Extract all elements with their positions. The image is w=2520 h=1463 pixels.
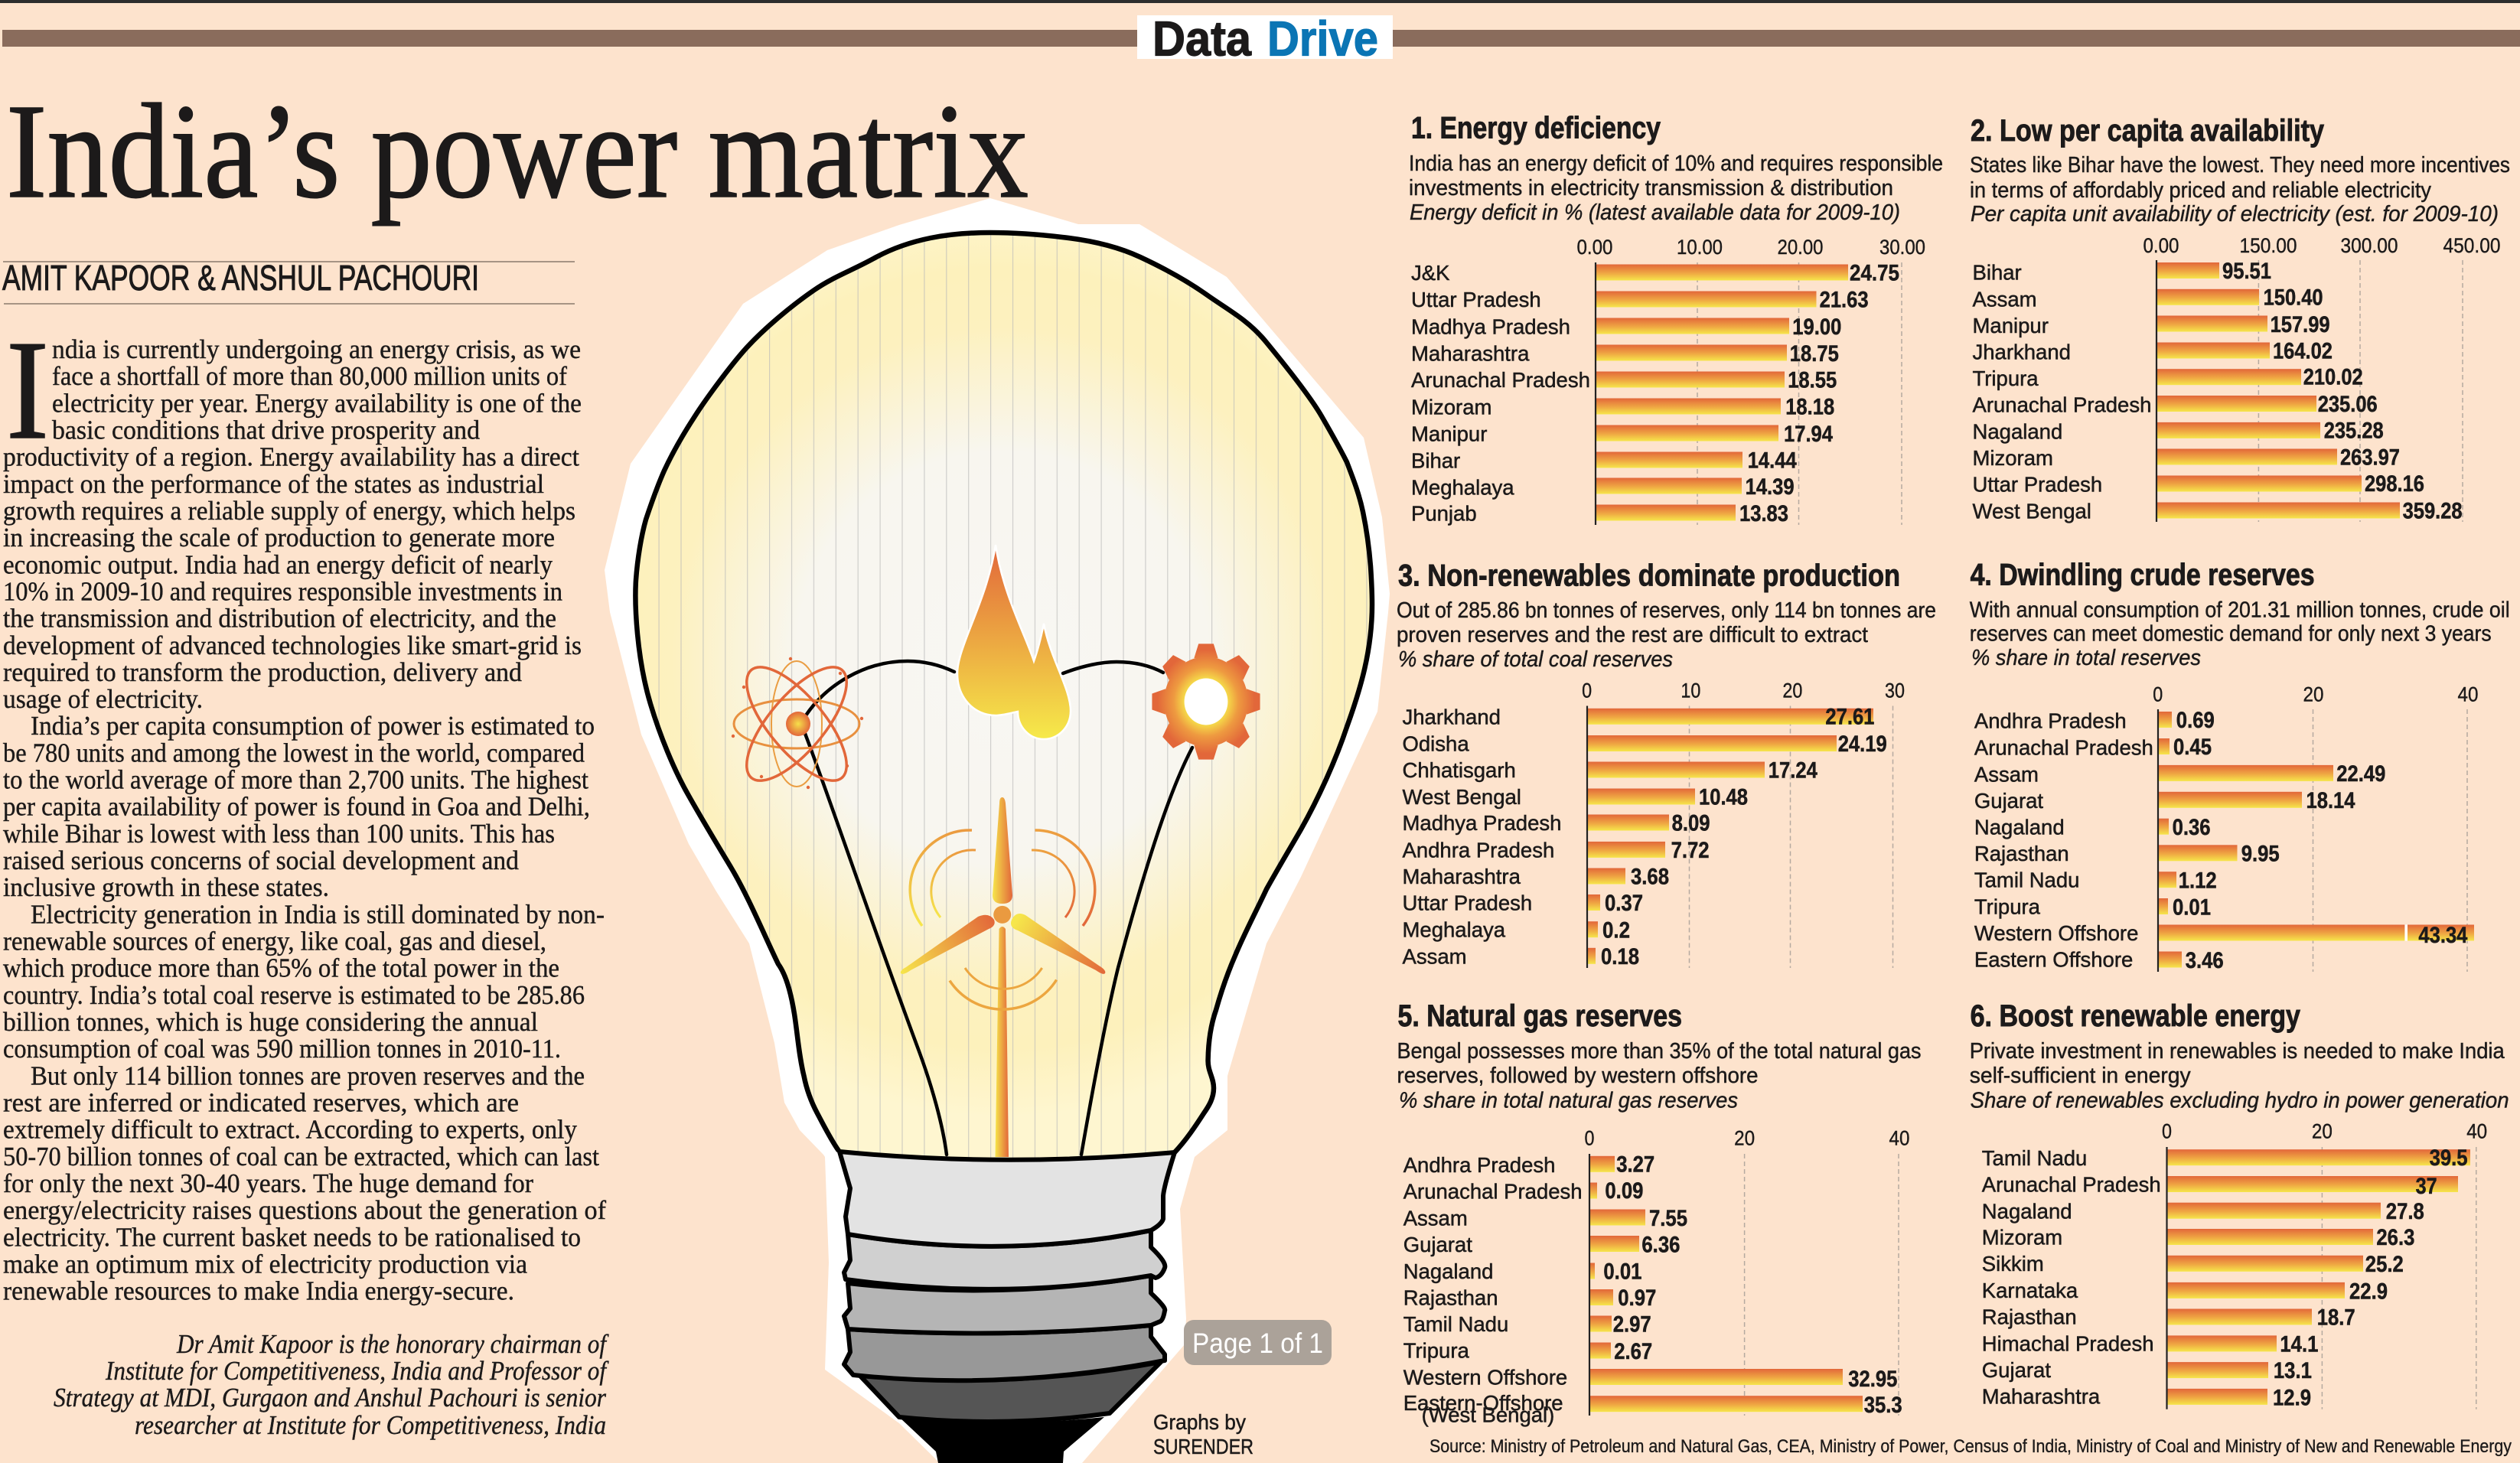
- bar chart 1: 30.00: [1879, 236, 1925, 259]
- bar chart 3: 0.37: [1605, 891, 1643, 916]
- bar chart 4: [1974, 683, 2478, 973]
- heading 5: 5. Natural gas reserves: [1397, 999, 1682, 1033]
- bar chart 3: [1402, 679, 1905, 969]
- bar chart 5: 2.97: [1613, 1311, 1651, 1337]
- bar chart 1: 19.00: [1792, 314, 1841, 340]
- bar chart 6: Arunachal Pradesh: [1982, 1173, 2161, 1197]
- article body text: usage of electricity.: [3, 684, 203, 714]
- description 5: Bengal possesses more than 35% of the total natural gas: [1397, 1039, 1921, 1064]
- bar chart 5: 7.55: [1649, 1206, 1687, 1231]
- bar chart 6: 40: [2466, 1119, 2487, 1142]
- bar chart 2: 164.02: [2273, 338, 2333, 363]
- description 1: Energy deficit in % (latest available data for 2009-10): [1410, 200, 1900, 225]
- white halo around bulb: [605, 198, 1390, 1463]
- article body text: per capita availability of power is found in Goa and Delhi,: [3, 792, 590, 822]
- bar chart 1: 18.55: [1788, 367, 1837, 393]
- bar chart 1: Manipur: [1411, 422, 1487, 446]
- author note: Institute for Competitiveness, India and Professor of: [105, 1356, 609, 1386]
- bar chart 3: 0.18: [1601, 944, 1639, 969]
- bar chart 6: 13.1: [2274, 1358, 2312, 1383]
- bar chart 6: 18.7: [2317, 1305, 2355, 1330]
- icon: wind turbine: [901, 797, 1105, 1157]
- bar chart 4: 3.46: [2186, 948, 2224, 973]
- bar chart 1: Uttar Pradesh: [1411, 288, 1541, 311]
- bar chart 3: 20: [1782, 679, 1802, 702]
- bar chart 1: 13.83: [1739, 501, 1788, 526]
- bar chart 6: Maharashtra: [1982, 1385, 2101, 1409]
- bar chart 5: Gujarat: [1403, 1233, 1472, 1256]
- bar chart 5: 6.36: [1641, 1232, 1680, 1257]
- bar chart 6: 14.1: [2280, 1331, 2318, 1357]
- bar chart 5: Arunachal Pradesh: [1403, 1180, 1583, 1204]
- bar chart 2: Uttar Pradesh: [1973, 473, 2102, 497]
- bulb glass glow: [628, 226, 1381, 1171]
- graphics credit: SURENDER: [1153, 1435, 1253, 1458]
- bar chart 6: 39.5: [2430, 1145, 2468, 1171]
- bar chart 2: 150.40: [2264, 285, 2323, 311]
- bar chart 3: Uttar Pradesh: [1402, 891, 1532, 915]
- bar chart 1: 14.44: [1748, 448, 1797, 473]
- bar chart 2: 157.99: [2271, 312, 2330, 337]
- description 3: proven reserves and the rest are difficult to extract: [1397, 623, 1868, 647]
- bar chart 1: Bihar: [1411, 449, 1460, 473]
- article body text: electricity per year. Energy availability is one of the: [52, 388, 582, 418]
- bar chart 2: 298.16: [2365, 471, 2424, 497]
- bar chart 4: 40: [2458, 683, 2478, 705]
- bar chart 3: 7.72: [1671, 838, 1710, 863]
- article body text: be 780 units and among the lowest in the world, compared: [3, 738, 585, 767]
- article body text: face a shortfall of more than 80,000 million units of: [52, 361, 567, 391]
- bar chart 5: 2.67: [1614, 1339, 1652, 1364]
- bar chart 1: Arunachal Pradesh: [1411, 368, 1590, 392]
- bar chart 5: Andhra Pradesh: [1403, 1153, 1555, 1177]
- bar chart 1: 14.39: [1746, 474, 1795, 500]
- bar chart 1: Mizoram: [1411, 396, 1491, 419]
- panel 5: natural gas reserves: [1397, 999, 1921, 1427]
- bar chart 4: 0.36: [2173, 815, 2211, 840]
- article body text: 10% in 2009-10 and requires responsible investments in: [3, 576, 562, 606]
- description 2: in terms of affordably priced and reliable electricity: [1970, 178, 2431, 203]
- bar chart 3: 0.2: [1602, 917, 1630, 943]
- bar chart 6: Tamil Nadu: [1982, 1146, 2087, 1170]
- panel 6: boost renewable energy: [1970, 999, 2509, 1410]
- description 6: self-sufficient in energy: [1970, 1064, 2191, 1088]
- bar chart 3: 0: [1582, 679, 1592, 702]
- article body text: India’s per capita consumption of power is estimated to: [31, 711, 595, 741]
- article body text: renewable resources to make India energy-secure.: [3, 1276, 514, 1306]
- description 5: reserves, followed by western offshore: [1397, 1064, 1759, 1088]
- bar chart 4: Assam: [1974, 763, 2039, 787]
- glass stripes: [628, 226, 1381, 1171]
- article body text: to the world average of more than 2,700 units. The highest: [3, 765, 588, 795]
- article body text: consumption of coal was 590 million tonnes in 2010-11.: [3, 1034, 561, 1064]
- bar chart 2: West Bengal: [1973, 500, 2091, 523]
- bar chart 4: 43.34: [2418, 923, 2468, 948]
- bar chart 6: Rajasthan: [1982, 1305, 2077, 1329]
- bar chart 2: 300.00: [2340, 234, 2398, 257]
- article body text: which produce more than 65% of the total power in the: [3, 953, 559, 983]
- bar chart 4: Gujarat: [1974, 789, 2043, 813]
- bar chart 3: West Bengal: [1402, 785, 1521, 809]
- bar chart 4: Andhra Pradesh: [1974, 709, 2127, 733]
- bar chart 1: J&K: [1411, 261, 1450, 285]
- bar chart 6: Himachal Pradesh: [1982, 1332, 2153, 1356]
- bar chart 4: Western Offshore: [1974, 921, 2138, 945]
- bar chart 4: 0.01: [2173, 894, 2211, 920]
- bar chart 6: Gujarat: [1982, 1358, 2051, 1382]
- description 6: [1970, 1039, 2509, 1113]
- bar chart 4: 18.14: [2306, 788, 2355, 813]
- bar chart 2: Arunachal Pradesh: [1973, 393, 2151, 417]
- bar chart 6: 20: [2312, 1119, 2333, 1142]
- panel 4: dwindling crude reserves: [1970, 558, 2510, 973]
- panel 3: non-renewables dominate production: [1397, 559, 1936, 969]
- bar chart 1: 0.00: [1576, 236, 1613, 259]
- bar chart 6: 25.2: [2365, 1252, 2404, 1277]
- article body text: while Bihar is lowest with less than 100 units. This has: [3, 819, 555, 849]
- article body text: basic conditions that drive prosperity and: [52, 415, 480, 445]
- bar chart 5: 3.27: [1616, 1152, 1654, 1177]
- bar chart 5: [1403, 1126, 1910, 1427]
- bar chart 5: 0.97: [1618, 1285, 1656, 1311]
- filament wires: [804, 661, 1192, 1155]
- bar chart 1: Madhya Pradesh: [1411, 315, 1570, 339]
- bar chart 6: Mizoram: [1982, 1226, 2062, 1250]
- bar chart 5: (West Bengal): [1422, 1403, 1554, 1427]
- bar chart 6: Karnataka: [1982, 1279, 2078, 1302]
- bar chart 3: 10.48: [1699, 784, 1748, 810]
- bar chart 2: Nagaland: [1973, 420, 2062, 444]
- bar chart 5: 40: [1889, 1126, 1910, 1149]
- bar chart 3: Chhatisgarh: [1402, 758, 1516, 782]
- bar chart 4: Rajasthan: [1974, 842, 2069, 865]
- heading 6: 6. Boost renewable energy: [1971, 999, 2301, 1033]
- bar chart 5: 32.95: [1848, 1367, 1897, 1392]
- bar chart 3: Maharashtra: [1402, 865, 1521, 888]
- bar chart 2: 0.00: [2143, 234, 2179, 257]
- bar chart 2: 95.51: [2222, 259, 2271, 284]
- bar chart 3: 10: [1681, 679, 1700, 702]
- article body text: the transmission and distribution of electricity, and the: [3, 604, 556, 634]
- bar chart 2: Jharkhand: [1973, 340, 2071, 364]
- bar chart 2: Assam: [1973, 287, 2037, 311]
- bar chart 2: 450.00: [2443, 234, 2501, 257]
- byline: AMIT KAPOOR & ANSHUL PACHOURI: [2, 258, 479, 298]
- article body text: required to transform the production, delivery and: [3, 657, 522, 687]
- article body text: inclusive growth in these states.: [3, 872, 329, 902]
- bar chart 1: Maharashtra: [1411, 342, 1530, 366]
- bar chart 4: 20: [2303, 683, 2323, 705]
- bar chart 1: 18.75: [1790, 341, 1839, 367]
- bar chart 1: 17.94: [1784, 422, 1833, 447]
- author note: Strategy at MDI, Gurgaon and Anshul Pachouri is senior: [54, 1383, 606, 1412]
- article body text: productivity of a region. Energy availability has a direct: [3, 442, 579, 472]
- article body text: extremely difficult to extract. According to experts, only: [3, 1115, 577, 1145]
- description 1: investments in electricity transmission & distribution: [1409, 176, 1893, 200]
- bar chart 6: 22.9: [2349, 1279, 2388, 1304]
- header label: Drive: Drive: [1267, 11, 1378, 66]
- header label: Data: Data: [1152, 11, 1251, 66]
- bar chart 1: 10.00: [1677, 236, 1723, 259]
- author note: Dr Amit Kapoor is the honorary chairman of: [176, 1329, 609, 1359]
- heading 2: 2. Low per capita availability: [1971, 114, 2325, 148]
- article body text: country. India’s total coal reserve is estimated to be 285.86: [3, 980, 585, 1010]
- bar chart 5: 20: [1734, 1126, 1755, 1149]
- bar chart 3: Madhya Pradesh: [1402, 811, 1561, 835]
- bar chart 1: [1411, 236, 1925, 526]
- bar chart 6: 37: [2416, 1174, 2437, 1199]
- description 5: % share in total natural gas reserves: [1399, 1088, 1738, 1113]
- bar chart 4: 0.45: [2173, 735, 2212, 760]
- bar chart 1: Meghalaya: [1411, 476, 1514, 500]
- bulb screw base: [839, 1152, 1175, 1463]
- heading 1: 1. Energy deficiency: [1411, 112, 1661, 145]
- illustration: light bulb: [605, 198, 1390, 1463]
- bar chart 1: 18.18: [1785, 394, 1834, 419]
- bar chart 4: Nagaland: [1974, 816, 2065, 839]
- bar chart 5: Eastern-Offshore: [1403, 1391, 1563, 1415]
- bar chart 5: Tamil Nadu: [1403, 1312, 1508, 1336]
- bar chart 1: 21.63: [1820, 287, 1869, 312]
- bar chart 2: Manipur: [1973, 314, 2049, 337]
- bar chart 3: 27.61: [1825, 705, 1874, 730]
- panel 1: energy deficiency: [1409, 112, 1943, 526]
- article body text: But only 114 billion tonnes are proven reserves and the: [31, 1061, 585, 1090]
- bar chart 3: 24.19: [1838, 732, 1887, 757]
- drop cap: I: [6, 311, 49, 469]
- bar chart 4: Tripura: [1974, 895, 2041, 919]
- bar chart 2: 210.02: [2303, 364, 2363, 389]
- article body text: impact on the performance of the states as industrial: [3, 469, 544, 499]
- page indicator pill: Page 1 of 1: [1192, 1328, 1323, 1359]
- bar chart 5: 35.3: [1864, 1393, 1902, 1418]
- article body text: economic output. India had an energy deficit of nearly: [3, 549, 553, 579]
- author note: [54, 1329, 609, 1440]
- bar chart 6: 27.8: [2386, 1199, 2424, 1224]
- bar chart 2: 150.00: [2239, 234, 2297, 257]
- bar chart 5: 0: [1584, 1126, 1595, 1149]
- bar chart 3: Odisha: [1402, 732, 1469, 756]
- bar chart 3: 17.24: [1769, 758, 1817, 783]
- heading 3: 3. Non-renewables dominate production: [1398, 559, 1900, 592]
- bar chart 3: Jharkhand: [1402, 705, 1501, 729]
- article body text: [3, 311, 606, 1306]
- article body text: raised serious concerns of social development and: [3, 846, 519, 875]
- bar chart 5: Nagaland: [1403, 1259, 1493, 1283]
- page indicator pill: [1184, 1320, 1332, 1365]
- bar chart 6: Sikkim: [1982, 1252, 2044, 1276]
- article body text: development of advanced technologies like smart-grid is: [3, 630, 582, 660]
- bar chart 4: 9.95: [2241, 841, 2280, 866]
- bar chart 3: 3.68: [1631, 864, 1669, 889]
- bar chart 6: 0: [2162, 1119, 2172, 1142]
- title: India’s power matrix: [6, 77, 1029, 226]
- bar chart 2: Mizoram: [1973, 446, 2053, 470]
- article body text: billion tonnes, which is huge considering the annual: [3, 1007, 538, 1037]
- bar chart 2: 235.06: [2318, 392, 2378, 417]
- bar chart 2: 235.28: [2324, 418, 2384, 443]
- graphics credit: [1153, 1410, 1253, 1458]
- article body text: growth requires a reliable supply of energy, which helps: [3, 496, 575, 526]
- bar chart 5: Western Offshore: [1403, 1366, 1567, 1390]
- bulb outline: [635, 233, 1372, 1152]
- header band: [0, 0, 2520, 66]
- icon: oil drops: [957, 545, 1071, 739]
- bar chart 2: 263.97: [2340, 445, 2400, 470]
- article body text: in increasing the scale of production to generate more: [3, 523, 555, 552]
- bar chart 5: Tripura: [1403, 1339, 1469, 1363]
- description 4: [1970, 598, 2510, 670]
- bar chart 1: Punjab: [1411, 502, 1477, 526]
- icon: gear: [1152, 644, 1260, 760]
- description 1: [1409, 152, 1943, 225]
- bar chart 3: Meghalaya: [1402, 918, 1506, 942]
- bar chart 2: [1973, 234, 2501, 523]
- bar chart 3: Assam: [1402, 945, 1467, 969]
- description 2: Per capita unit availability of electricity (est. for 2009-10): [1971, 202, 2499, 226]
- article body text: Electricity generation in India is still dominated by non-: [31, 899, 605, 929]
- author note: researcher at Institute for Competitiveness, India: [135, 1410, 606, 1440]
- description 3: % share of total coal reserves: [1398, 647, 1673, 672]
- bar chart 4: 0.69: [2176, 708, 2215, 733]
- description 1: India has an energy deficit of 10% and requires responsible: [1409, 152, 1943, 176]
- bar chart 4: Tamil Nadu: [1974, 868, 2079, 892]
- bar chart 4: Eastern Offshore: [1974, 948, 2133, 972]
- graphics credit: Graphs by: [1153, 1410, 1246, 1434]
- article body text: ndia is currently undergoing an energy crisis, as we: [52, 334, 581, 364]
- description 3: [1397, 598, 1936, 672]
- heading 4: 4. Dwindling crude reserves: [1971, 558, 2315, 591]
- bar chart 1: 20.00: [1777, 236, 1823, 259]
- icon: atom: [730, 652, 863, 796]
- bar chart 4: 22.49: [2336, 761, 2385, 787]
- bar chart 5: Assam: [1403, 1207, 1468, 1230]
- bar chart 6: 26.3: [2376, 1225, 2414, 1250]
- bar chart 3: Andhra Pradesh: [1402, 839, 1554, 862]
- bar chart 4: 1.12: [2179, 868, 2217, 893]
- article body text: 50-70 billion tonnes of coal can be extracted, which can last: [3, 1142, 599, 1171]
- description 3: Out of 285.86 bn tonnes of reserves, only 114 bn tonnes are: [1397, 598, 1936, 623]
- description 6: Share of renewables excluding hydro in power generation: [1971, 1088, 2509, 1113]
- article body text: renewable sources of energy, like coal, gas and diesel,: [3, 926, 546, 956]
- panel 2: low per capita availability: [1970, 114, 2510, 523]
- bar chart 5: 0.09: [1605, 1178, 1643, 1204]
- bar chart 2: Tripura: [1973, 367, 2039, 390]
- description 6: Private investment in renewables is needed to make India: [1970, 1039, 2505, 1064]
- bar chart 5: 0.01: [1603, 1259, 1641, 1284]
- bar chart 4: 0: [2153, 683, 2163, 705]
- bar chart 3: 8.09: [1672, 810, 1710, 836]
- description 4: % share in total reserves: [1971, 646, 2201, 670]
- bar chart 2: 359.28: [2403, 498, 2463, 523]
- article body text: energy/electricity raises questions about the generation of: [3, 1195, 606, 1225]
- bar chart 3: 30: [1885, 679, 1905, 702]
- article body text: rest are inferred or indicated reserves, which are: [3, 1088, 519, 1117]
- article body text: electricity. The current basket needs to be rationalised to: [3, 1222, 581, 1252]
- article body text: make an optimum mix of electricity production via: [3, 1249, 527, 1279]
- bar chart 6: 12.9: [2273, 1385, 2311, 1410]
- description 5: [1397, 1039, 1921, 1113]
- bar chart 4: Arunachal Pradesh: [1974, 736, 2153, 760]
- bar chart 2: Bihar: [1973, 261, 2022, 285]
- bar chart 5: Rajasthan: [1403, 1286, 1498, 1310]
- bar chart 6: Nagaland: [1982, 1200, 2072, 1224]
- bar chart 1: 24.75: [1850, 260, 1899, 285]
- bar chart 6: [1982, 1119, 2487, 1410]
- article body text: for only the next 30-40 years. The huge demand for: [3, 1168, 533, 1198]
- description 2: [1970, 153, 2510, 226]
